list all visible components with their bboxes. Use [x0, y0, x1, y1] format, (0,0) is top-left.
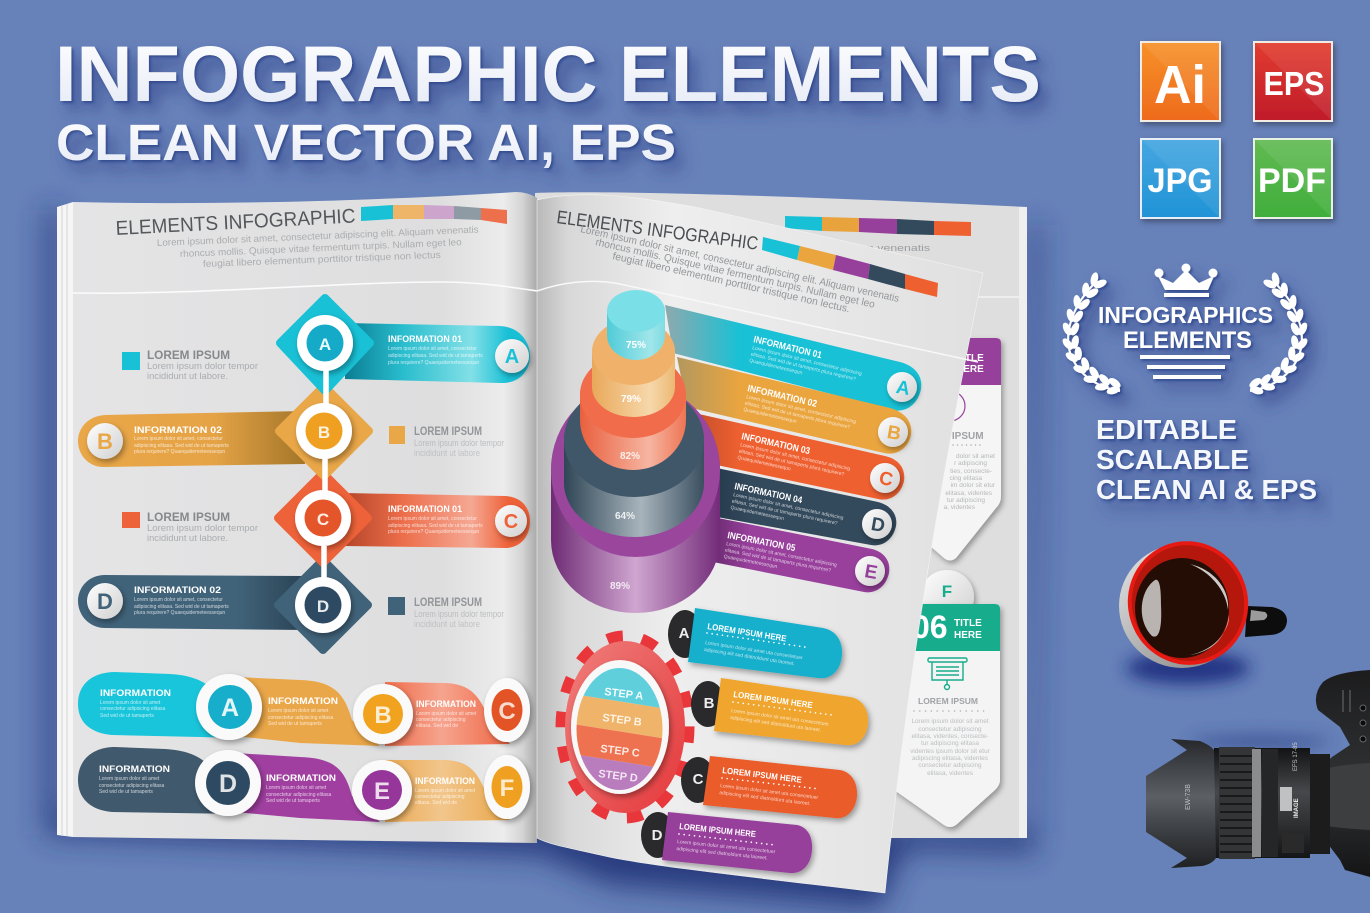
- icon: EPS file: EPS: [1264, 65, 1324, 102]
- cylinder orange: 79%: [621, 394, 641, 405]
- segment orange: elitasa. Sed wid de: [415, 800, 457, 806]
- tag: green 06 title here: Lorem ipsum dolor sit amet: [911, 718, 989, 725]
- segment navy: INFORMATION: [99, 764, 170, 775]
- segment orange: consectetur adipiscing elitasa: [268, 715, 334, 721]
- ribbon A: INFORMATION 01: [752, 334, 824, 361]
- badge A: [196, 674, 262, 740]
- camera: [1146, 670, 1370, 877]
- legend B: Lorem ipsum dolor tempor: [414, 438, 504, 449]
- segment cyan: Sed wid de ut tamaperts: [100, 713, 154, 719]
- badge B: [353, 684, 413, 744]
- cylinder purple: [551, 383, 720, 613]
- ribbon A: A: [505, 346, 519, 368]
- legend B: [389, 424, 504, 459]
- step bands: [576, 668, 662, 790]
- segment cyan: [78, 672, 240, 738]
- feature list: [1096, 414, 1317, 505]
- ribbon A: Lorem ipsum dolor sit amet, consectetur adipiscing: [752, 345, 863, 377]
- segment purple: Sed wid de ut tamaperts: [266, 798, 320, 804]
- badge B: B: [374, 702, 392, 729]
- ribbon A: adipiscing elitasa. Sed wid de ut tamaperts: [388, 353, 483, 359]
- cylinder navy: 64%: [615, 511, 635, 522]
- ribbon D: Lorem ipsum dolor sit amet, consectetur adipiscing: [733, 492, 844, 521]
- segment cyan: Lorem ipsum dolor sit amet: [100, 700, 161, 706]
- badge E: [352, 760, 412, 820]
- camera body: [1310, 670, 1370, 877]
- legend A: [122, 348, 258, 382]
- bubble F: [920, 570, 974, 624]
- pill C: [681, 756, 857, 818]
- diamond A: A: [319, 335, 331, 354]
- badge C: C: [498, 698, 516, 725]
- ribbon C: Lorem ipsum dolor sit amet, consectetur adipiscing: [740, 442, 851, 472]
- tag: purple title here: cing elitasa: [949, 475, 982, 482]
- badge F: F: [500, 775, 514, 802]
- pill B: [691, 678, 868, 745]
- icon: EPS file: [1254, 42, 1332, 121]
- segment red: [385, 682, 510, 746]
- segment purple: consectetur adipiscing elitasa: [266, 792, 332, 798]
- bottom row 2: [78, 747, 530, 822]
- badge text: INFOGRAPHICS: [1098, 302, 1273, 328]
- tag: purple title here: elitasa, videntes: [945, 490, 993, 497]
- diamond B: [279, 386, 369, 476]
- diamond B: B: [318, 423, 330, 442]
- pill A: Lorem ipsum dolor sit amet uta consectetuer: [705, 640, 803, 661]
- page intro text: rhoncus mollis. Quisque vitae fermentum turpis. Nullam eget leo: [180, 237, 462, 260]
- segment purple: Lorem ipsum dolor sit amet: [266, 785, 327, 791]
- segment navy: Lorem ipsum dolor sit amet: [99, 776, 160, 782]
- front sheet: [537, 195, 983, 893]
- pill B: B: [704, 695, 715, 712]
- cylinder purple: 89%: [610, 581, 630, 592]
- right laurel: [1247, 269, 1310, 398]
- ribbon C: Quaequidemeteessequn: [737, 455, 791, 472]
- left page: [57, 192, 537, 843]
- cup handle: [1245, 606, 1287, 637]
- legend D: Lorem ipsum dolor tempor: [414, 609, 504, 620]
- segment red: consectetur adipiscing: [416, 717, 466, 723]
- ribbon C: [345, 493, 530, 548]
- ribbon B: INFORMATION 02: [746, 383, 818, 410]
- page intro text: feugiat libero elementum porttitor tristique non lectus: [203, 250, 441, 270]
- ribbon C: INFORMATION 01: [388, 504, 463, 515]
- icon: PDF file: PDF: [1258, 162, 1326, 200]
- ribbon B: B: [97, 429, 113, 454]
- pill B: Lorem ipsum dolor sit amet uta consectetuer: [731, 708, 830, 728]
- badge C: [484, 678, 530, 742]
- ribbon C: plura requirere? Quaequidemeteessequn: [388, 529, 479, 535]
- step bands: STEP D: [598, 768, 638, 785]
- ribbon D: D: [97, 589, 113, 614]
- icon: Ai file: [1141, 42, 1220, 121]
- page intro text: [157, 225, 479, 270]
- tag: purple title here: HERE: [956, 364, 984, 375]
- lens hood: [1146, 739, 1216, 868]
- legend D: incididunt ut labore: [414, 619, 480, 630]
- pill A: LOREM IPSUM HERE: [707, 621, 788, 644]
- segment purple: [235, 753, 380, 822]
- page stack: [57, 202, 73, 837]
- ribbon E: INFORMATION 05: [726, 530, 797, 554]
- sheet intro text: rhoncus mollis. Quisque vitae fermentum turpis. Nullam eget leo: [594, 237, 876, 311]
- ribbon B: [78, 411, 305, 467]
- ribbon A: A: [894, 377, 912, 400]
- tag: purple title here: dolor sit amet: [956, 453, 995, 460]
- cylinder navy: [564, 383, 704, 537]
- pill B: LOREM IPSUM HERE: [733, 689, 814, 710]
- pill C: adipiscing elit sed diatnoldunt uta laoreet.: [719, 790, 811, 807]
- badge F: [484, 755, 530, 819]
- tag: green 06 title here: adipiscing elitasa, videntes: [912, 755, 988, 762]
- badge D: D: [219, 770, 237, 798]
- segment purple: INFORMATION: [266, 773, 336, 784]
- tag: green 06 title here: HERE: [954, 630, 982, 641]
- cylinder red: 82%: [620, 451, 640, 462]
- ribbon D: [78, 575, 305, 630]
- back page text: uam venenatis: [850, 243, 930, 254]
- badge: laurel and crown: ELEMENTS: [1123, 327, 1252, 354]
- ribbon D: [712, 467, 896, 545]
- icon: PDF file: [1254, 139, 1332, 218]
- gear: [560, 637, 688, 817]
- diamond A: [280, 298, 370, 391]
- lens barrel: [1214, 742, 1330, 859]
- book shadow: [46, 210, 1040, 908]
- tag: green 06 title here: consectetur adipiscing: [918, 726, 982, 733]
- segment orange: INFORMATION: [415, 776, 475, 787]
- segment orange: Lorem ipsum dolor sit amet: [268, 708, 329, 714]
- ribbon A: Lorem ipsum dolor sit amet, consectetur: [388, 346, 477, 352]
- segment red: elitasa. Sed wid de: [416, 723, 458, 729]
- sheet colour strip: [762, 237, 938, 297]
- bubble F: F: [942, 582, 952, 601]
- ribbon E: Quaequidemeteessequn: [723, 554, 778, 570]
- ribbon C: C: [877, 468, 895, 491]
- ribbon B: Quaequidemeteessequn: [743, 407, 797, 425]
- ribbon B: Lorem ipsum dolor sit amet, consectetur: [134, 436, 223, 442]
- gear teeth: [562, 637, 688, 817]
- segment orange: Lorem ipsum dolor sit amet: [415, 788, 476, 794]
- feature list: CLEAN AI & EPS: [1096, 474, 1317, 505]
- segment orange: INFORMATION: [268, 696, 338, 707]
- tag: purple title here: ties, consecte-: [950, 468, 992, 475]
- ribbon A: [345, 323, 530, 383]
- cylinder cyan: 75%: [626, 340, 646, 351]
- ribbon D: Quaequidemeteessequn: [730, 505, 785, 522]
- segment navy: Sed wid de ut tamaperts: [99, 789, 153, 795]
- legend D: [388, 595, 504, 630]
- camera: EW-73B: [1185, 784, 1192, 810]
- ribbon B: B: [885, 422, 903, 445]
- tag: green 06 title here: TITLE: [954, 618, 982, 629]
- pill D: Lorem ipsum dolor sit amet uta consectetuer: [677, 839, 776, 855]
- tag: green 06 title here: elitasa, videntes: [927, 770, 973, 777]
- diamond C: C: [317, 510, 329, 529]
- ribbon D: elitasa. Sed wid de ut tamaperts plura requirere?: [731, 498, 838, 527]
- tag: purple title here: [900, 330, 1001, 560]
- page intro text: Lorem ipsum dolor sit amet, consectetur adipiscing elit. Aliquam venenatis: [157, 225, 479, 249]
- connector line: [324, 370, 326, 578]
- back right page: [535, 192, 1027, 838]
- legend C: Lorem ipsum dolor tempor: [147, 523, 258, 534]
- ribbon D: plura requirere? Quaequidemeteessequn: [134, 610, 225, 616]
- step bands: STEP C: [600, 743, 640, 760]
- tag: green 06 title here: videntes ipsum dolor sit etur: [910, 748, 991, 755]
- title: CLEAN VECTOR AI, EPS: [56, 114, 676, 171]
- pill A: A: [679, 625, 690, 642]
- segment cyan: consectetur adipiscing elitasa: [100, 706, 166, 712]
- ribbon A: INFORMATION 01: [388, 334, 463, 345]
- sheet heading: ELEMENTS INFOGRAPHIC: [555, 206, 759, 254]
- heading colour strip: [361, 205, 507, 224]
- ribbon B: plura requirere? Quaequidemeteessequn: [134, 449, 225, 455]
- pill A: adipiscing elit sed diatnoldunt uta laoreet.: [704, 647, 795, 667]
- coffee cup: [1112, 525, 1287, 684]
- feature list: EDITABLE: [1096, 414, 1237, 445]
- ribbon E: E: [863, 561, 879, 584]
- pill C: C: [693, 771, 704, 788]
- ribbon E: elitasa. Sed wid de ut tamaperts plura requirere?: [724, 547, 832, 574]
- tag: purple title here: TITLE: [956, 353, 984, 364]
- legend B: LOREM IPSUM: [414, 424, 482, 438]
- tag: green 06 title here: consectetur adipiscing: [918, 762, 982, 769]
- ribbon A: plura requirere? Quaequidemeteessequn: [388, 360, 479, 366]
- cylinder orange: [592, 319, 675, 417]
- diamond C: [278, 473, 368, 563]
- ribbon C: elitasa. Sed wid de ut tamaperts plura requirere?: [738, 448, 845, 478]
- legend D: LOREM IPSUM: [414, 595, 482, 609]
- tag: purple title here: r adipiscing: [954, 460, 987, 467]
- tag: green 06 title here: 06: [912, 609, 948, 645]
- legend A: incididunt ut labore.: [147, 371, 228, 382]
- feature list: SCALABLE: [1096, 444, 1249, 475]
- ribbon B: [677, 357, 911, 454]
- coffee reflection: [1142, 580, 1161, 637]
- step bands: STEP A: [604, 686, 644, 703]
- sheet intro text: Lorem ipsum dolor sit amet, consectetur adipiscing elit. Aliquam venenatis: [579, 224, 900, 305]
- pill B: adipiscing elit sed diatnoldunt uta laoreet.: [730, 715, 821, 734]
- pill D: LOREM IPSUM HERE: [679, 821, 757, 839]
- segment orange: [385, 760, 510, 822]
- ribbon D: Lorem ipsum dolor sit amet, consectetur: [134, 597, 223, 603]
- stacked cylinder chart: [551, 290, 720, 613]
- segment navy: consectetur adipiscing elitasa: [99, 783, 165, 789]
- lens barrel: IMAGE: [1294, 798, 1300, 818]
- pill D: D: [652, 827, 663, 844]
- ribbon C: [690, 412, 904, 500]
- diamond D: D: [317, 597, 329, 616]
- ribbon D: INFORMATION 04: [733, 481, 804, 506]
- ribbon D: INFORMATION 02: [134, 585, 221, 596]
- ribbon B: adipiscing elitasa. Sed wid de ut tamaperts: [134, 443, 229, 449]
- tag: purple title here: LOREM IPSUM: [913, 431, 984, 442]
- ribbon D: adipiscing elitasa. Sed wid de ut tamaperts: [134, 604, 229, 610]
- ribbon A: [665, 305, 921, 411]
- ribbon C: Lorem ipsum dolor sit amet, consectetur: [388, 516, 477, 522]
- ribbon A: elitasa. Sed wid de ut tamaperts plura requirere?: [750, 351, 856, 382]
- tag: green 06 title here: LOREM IPSUM: [918, 696, 978, 706]
- icon: Ai file: Ai: [1154, 55, 1206, 115]
- pill A: [668, 608, 842, 678]
- icon: JPG file: JPG: [1148, 162, 1212, 200]
- tag: green 06 title here: tur adipiscing elitasa: [921, 740, 979, 747]
- cylinder red: [580, 352, 686, 470]
- ribbon B: Lorem ipsum dolor sit amet, consectetur adipiscing: [746, 394, 857, 425]
- tag: purple title here: a, videntes: [944, 504, 976, 511]
- pill D: [641, 812, 812, 873]
- legend C: incididunt ut labore.: [147, 533, 228, 544]
- pill C: LOREM IPSUM HERE: [722, 765, 803, 785]
- diamond D: [278, 560, 368, 650]
- badge E: E: [374, 778, 390, 805]
- badge: laurel and crown: [1060, 264, 1310, 398]
- ribbon C: C: [504, 511, 518, 533]
- left laurel: [1060, 269, 1123, 398]
- cylinder cyan: [607, 290, 665, 360]
- segment orange: consectetur adipiscing: [415, 794, 465, 800]
- segment navy: [78, 747, 240, 814]
- icon: crown: [1154, 264, 1218, 297]
- legend C: [122, 510, 258, 544]
- pill D: adipiscing elit sed diatnoldunt uta laoreet.: [676, 846, 768, 862]
- sheet intro text: feugiat libero elementum porttitor tristique non lectus.: [611, 251, 851, 315]
- icon: JPG file: [1141, 139, 1220, 218]
- tag: purple title here: tur adipiscing: [947, 497, 985, 504]
- back page colour strip: [785, 216, 971, 236]
- lens barrel: EFS 17-85: [1293, 742, 1299, 771]
- tag: green 06 title here: [880, 570, 1000, 827]
- segment red: Lorem ipsum dolor sit amet: [416, 711, 477, 717]
- title: INFOGRAPHIC ELEMENTS: [55, 29, 1041, 118]
- ribbon C: adipiscing elitasa. Sed wid de ut tamaperts: [388, 523, 483, 529]
- pill C: Lorem ipsum dolor sit amet uta consectetuer: [720, 783, 819, 801]
- legend A: LOREM IPSUM: [147, 348, 230, 362]
- segment red: INFORMATION: [416, 699, 476, 710]
- segment cyan: INFORMATION: [100, 688, 171, 699]
- title: [55, 29, 1041, 171]
- step bands: STEP B: [602, 712, 642, 729]
- tag: purple title here: im dolor sit etur: [951, 482, 996, 489]
- ribbon D: D: [869, 514, 887, 537]
- ribbon B: elitasa. Sed wid de ut tamaperts plura requirere?: [744, 400, 851, 431]
- ribbon E: [713, 518, 889, 592]
- segment orange: Sed wid de ut tamaperts: [268, 721, 322, 727]
- ribbon B: INFORMATION 02: [134, 425, 222, 436]
- ribbon E: Lorem ipsum dolor sit amet, consectetur adipiscing: [726, 541, 837, 568]
- ribbon A: Quaequidemeteessequn: [748, 358, 803, 376]
- legend A: Lorem ipsum dolor tempor: [147, 361, 258, 372]
- legend C: LOREM IPSUM: [147, 510, 230, 524]
- legend B: incididunt ut labore: [414, 448, 480, 459]
- segment orange: [235, 677, 380, 746]
- tag: green 06 title here: elitasa, videntes, consecte-: [911, 733, 989, 740]
- icon: projector screen: [928, 658, 967, 690]
- ribbon C: INFORMATION 03: [740, 431, 811, 457]
- page heading: ELEMENTS INFOGRAPHIC: [115, 205, 356, 240]
- bottom row 1: [78, 672, 530, 746]
- badge A: A: [221, 694, 239, 722]
- badge D: [195, 750, 261, 816]
